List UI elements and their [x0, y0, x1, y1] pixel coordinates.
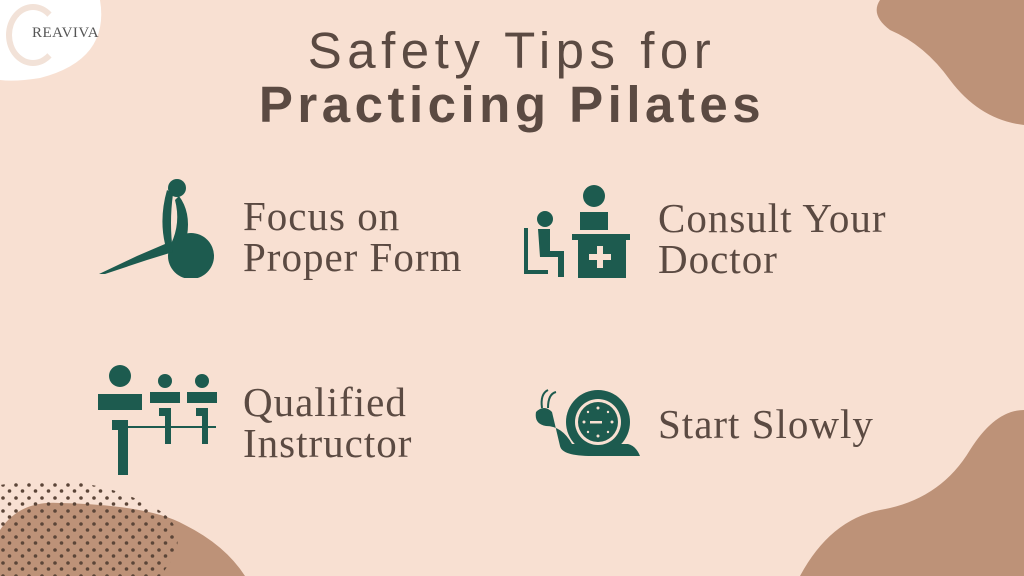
text: focus on proper form: Focus on: [243, 193, 400, 239]
text: consult your doctor: [658, 195, 886, 282]
text: consult your doctor: Doctor: [658, 236, 778, 282]
icon: pilates ball: [99, 179, 214, 278]
title: Safety Tips for: [308, 22, 716, 79]
text: qualified instructor: [243, 379, 412, 466]
icon: class with instructor: [98, 365, 217, 475]
icon: doctor: [524, 185, 630, 278]
text: focus on proper form: Proper Form: [243, 234, 462, 280]
title: Practicing Pilates: [259, 76, 765, 133]
text: qualified instructor: Instructor: [243, 420, 412, 466]
text: focus on proper form: [243, 193, 462, 280]
logo: [6, 4, 99, 66]
icon: snail clock: [536, 389, 640, 456]
text: start slowly: Start Slowly: [658, 401, 874, 447]
logo: REAVIVA: [32, 25, 99, 41]
text: consult your doctor: Consult Your: [658, 195, 886, 241]
title: [259, 22, 765, 133]
text: qualified instructor: Qualified: [243, 379, 407, 425]
